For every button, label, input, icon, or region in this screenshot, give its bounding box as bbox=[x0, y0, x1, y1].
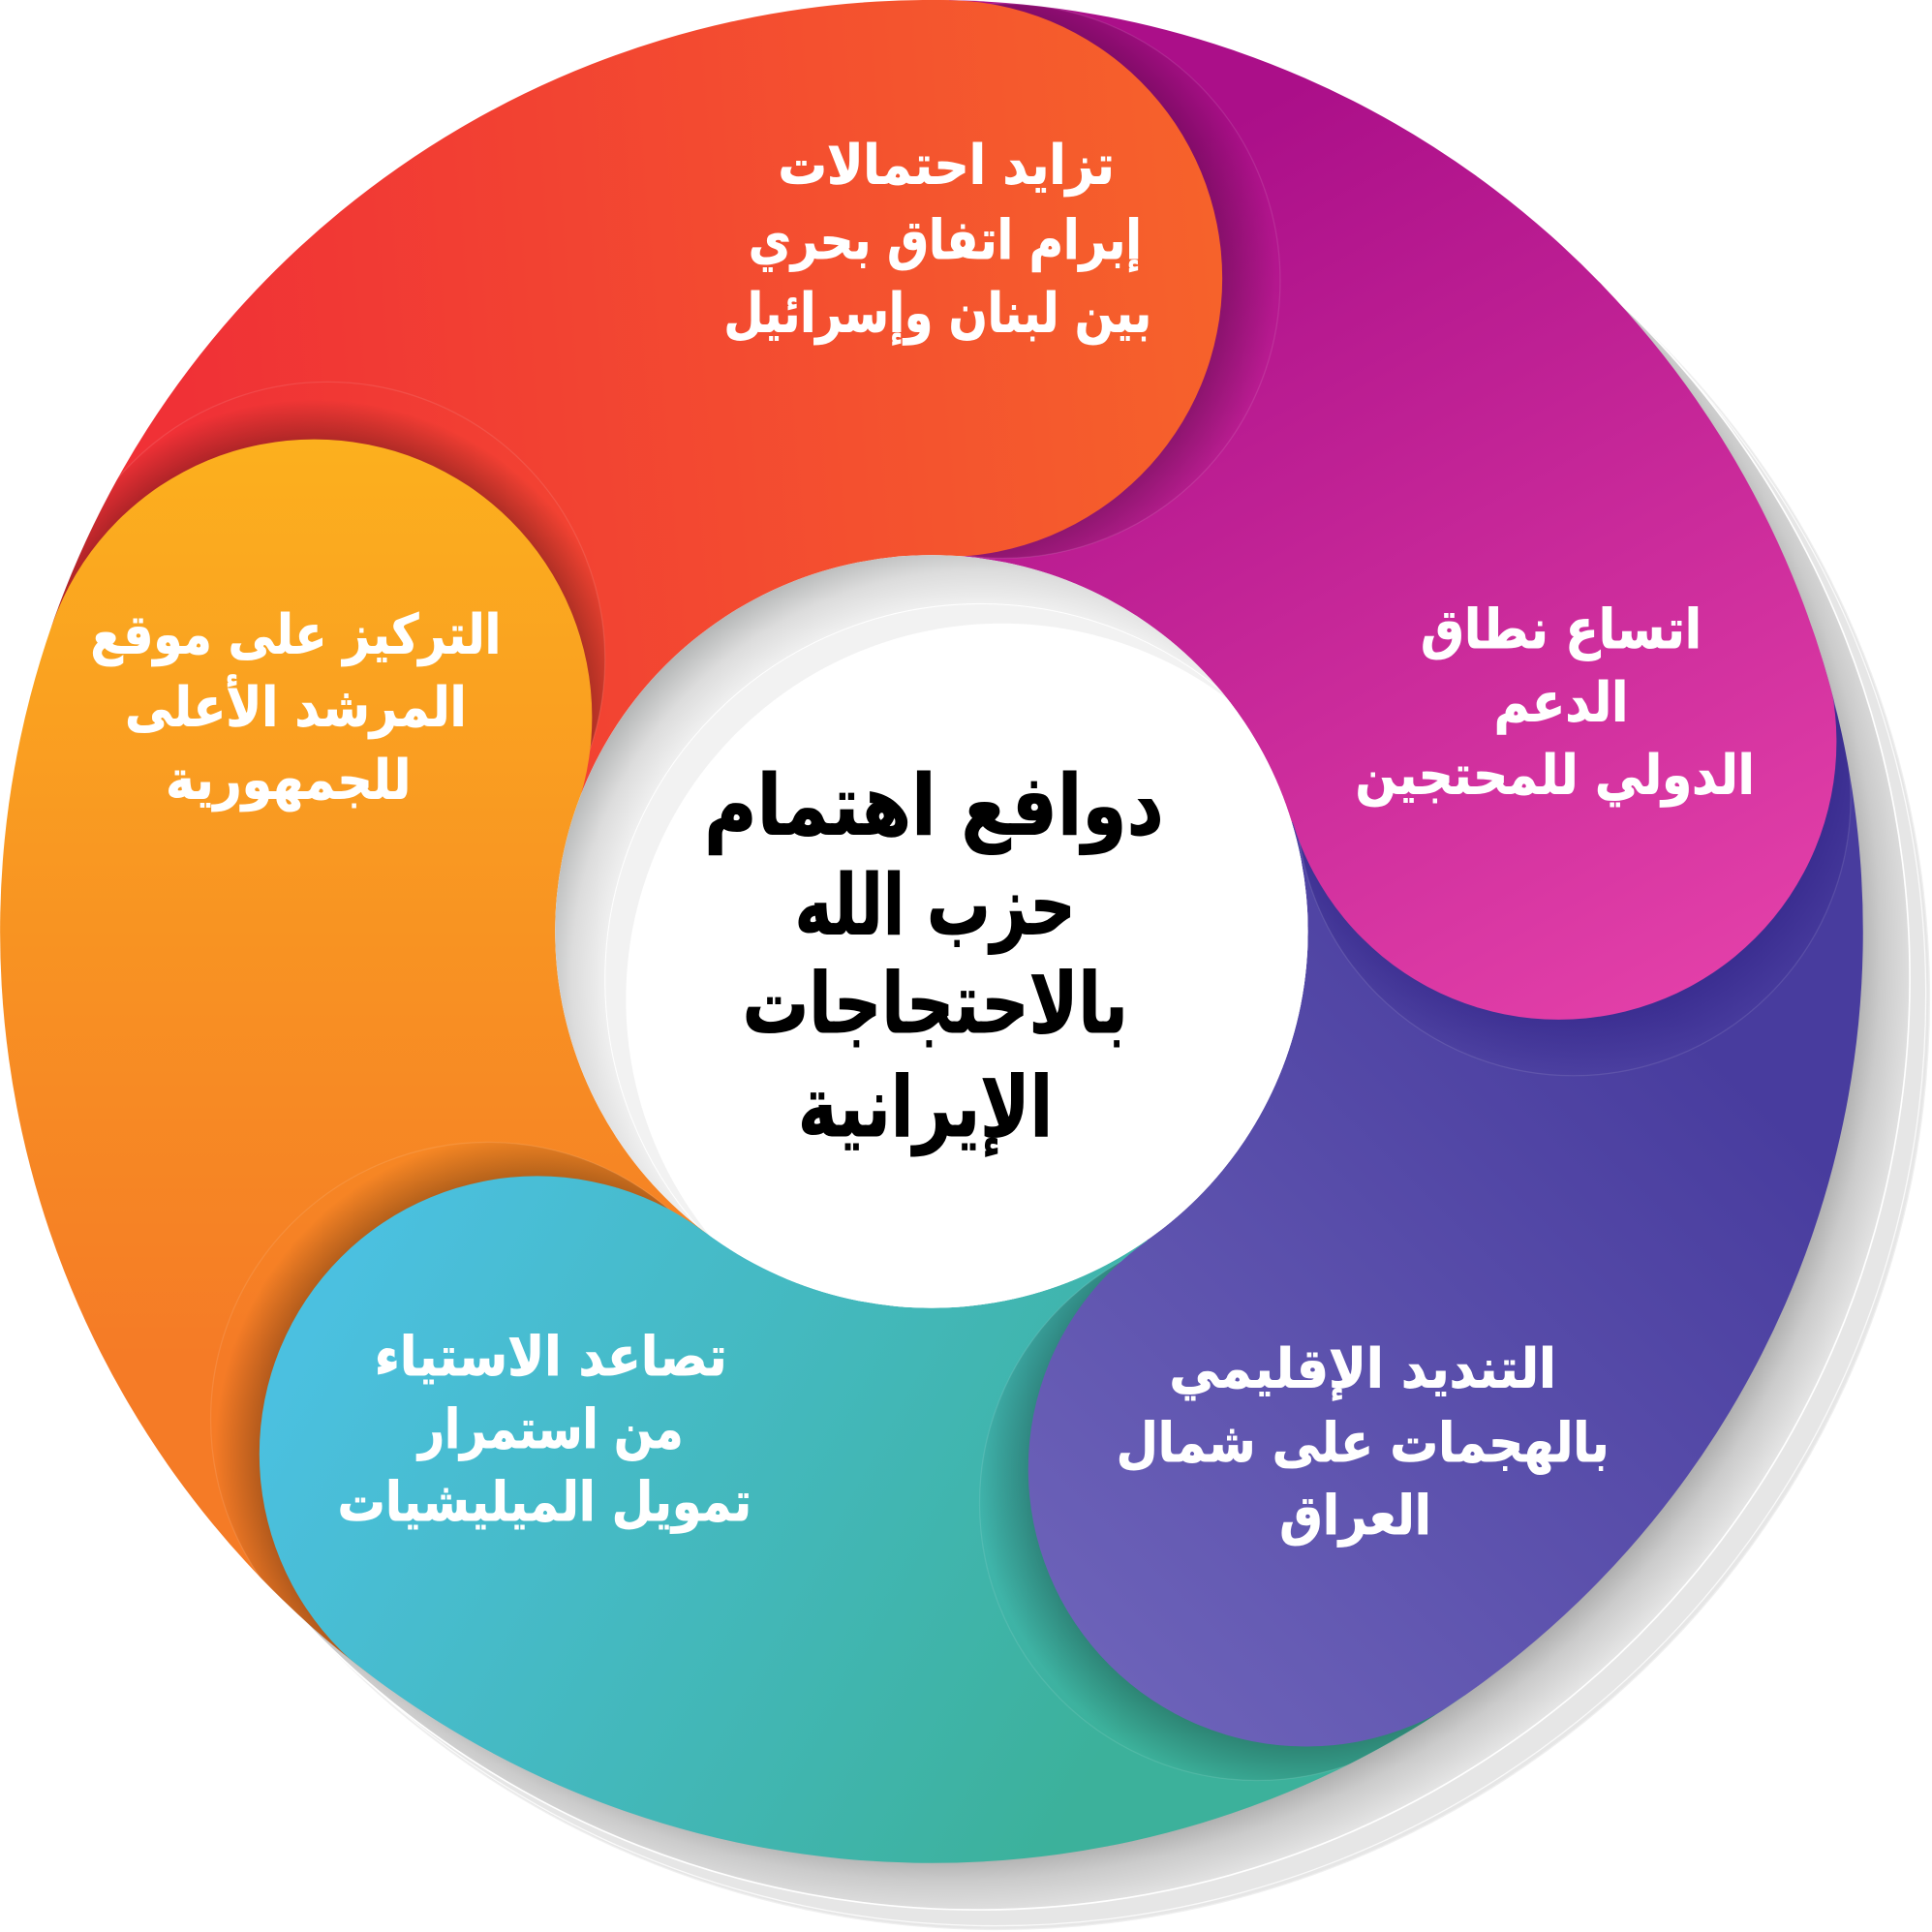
text: indigo petal bbox=[1117, 1338, 1610, 1548]
title: دوافع اهتمام bbox=[704, 757, 1164, 854]
text: red petal: تزايد احتمالات bbox=[778, 135, 1115, 198]
text: indigo petal: بالهجمات على شمال bbox=[1117, 1412, 1610, 1475]
text: magenta petal bbox=[1356, 598, 1755, 807]
panel: lower-left teal petal bbox=[260, 1176, 765, 1697]
panel: right magenta petal bbox=[1292, 521, 1836, 1020]
text: orange petal bbox=[91, 603, 501, 812]
panel: top red petal bbox=[724, 0, 1222, 556]
panel: lower-right indigo petal bbox=[1028, 1191, 1610, 1747]
text: teal petal: من استمرار bbox=[415, 1398, 684, 1461]
title: بالاحتجاجات bbox=[743, 956, 1128, 1053]
text: orange petal: المرشد الأعلى bbox=[125, 673, 467, 739]
text: indigo petal: العراق bbox=[1279, 1485, 1431, 1548]
centre hub bbox=[555, 555, 1308, 1308]
text: orange petal: للجمهورية bbox=[166, 749, 411, 812]
text: teal petal: تمويل الميليشيات bbox=[338, 1471, 751, 1534]
text: red petal bbox=[723, 135, 1151, 345]
text: magenta petal: الدولي للمحتجين bbox=[1356, 744, 1755, 807]
panel: left orange petal bbox=[48, 440, 593, 937]
text: indigo petal: التنديد الإقليمي bbox=[1169, 1338, 1556, 1401]
text: red petal: إبرام اتفاق بحري bbox=[749, 209, 1142, 272]
title bbox=[704, 757, 1164, 1156]
text: teal petal: تصاعد الاستياء bbox=[375, 1326, 727, 1389]
text: magenta petal: الدعم bbox=[1494, 671, 1628, 734]
title: الإيرانية bbox=[798, 1059, 1053, 1156]
text: magenta petal: اتساع نطاق bbox=[1421, 598, 1702, 661]
title: حزب الله bbox=[795, 857, 1076, 954]
text: teal petal bbox=[338, 1326, 751, 1534]
text: red petal: بين لبنان وإسرائيل bbox=[723, 282, 1151, 345]
text: orange petal: التركيز على موقع bbox=[91, 603, 501, 666]
